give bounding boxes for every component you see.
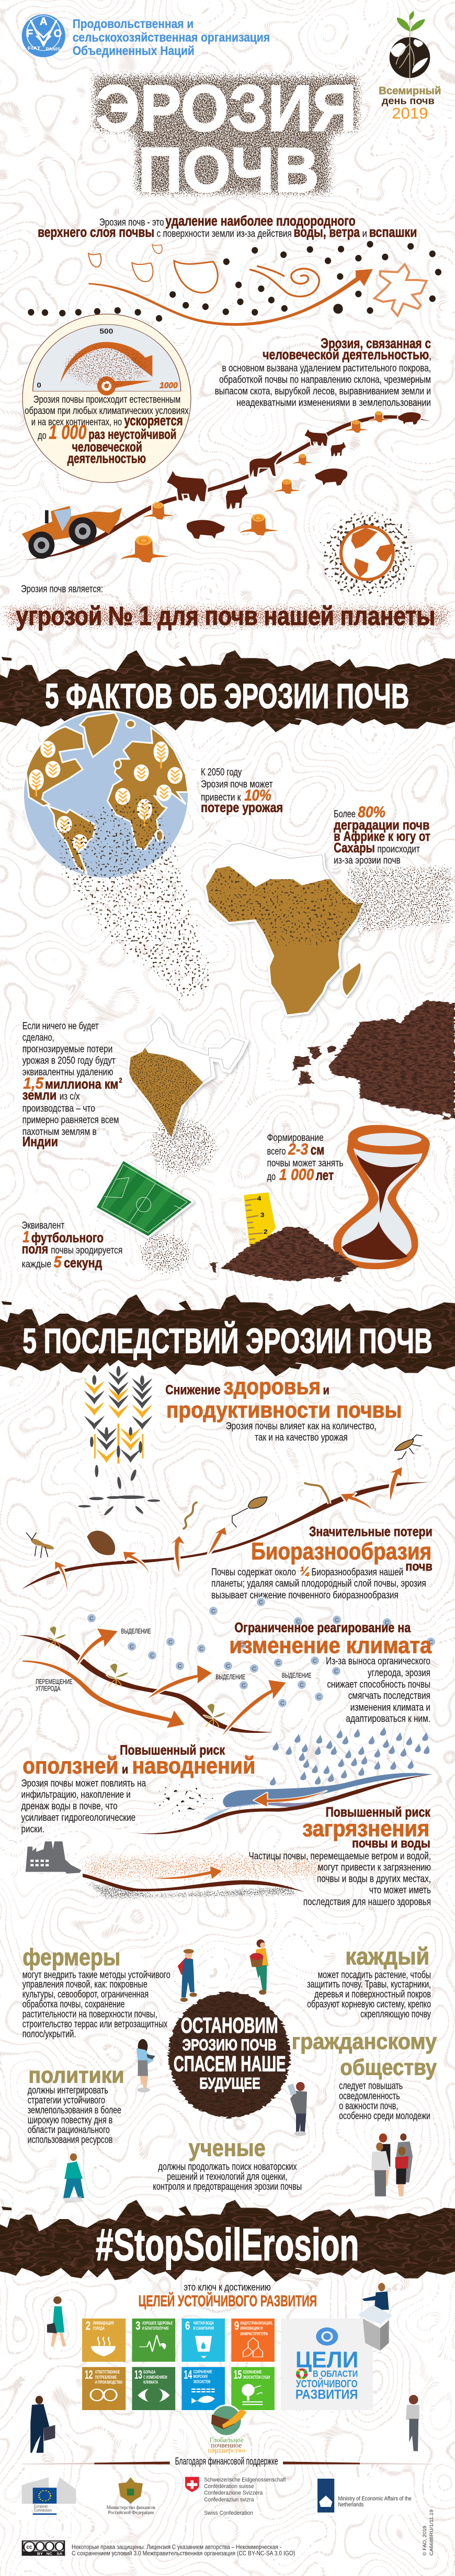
organisation name: сельскохозяйственная организация xyxy=(73,30,270,44)
landslides and floods text: усиливает гидрогеологические xyxy=(21,1812,135,1823)
soil formation text: лет xyxy=(316,1167,334,1183)
India erosion text: сделано, xyxy=(22,1032,54,1043)
soil formation text: см xyxy=(311,1142,324,1158)
panel: Sustainable Development Goals logo: РАЗВИТИЯ xyxy=(295,2387,358,2402)
soil health text: Снижение xyxy=(165,1383,221,1397)
carbon flow diagram: ВЫДЕЛЕНИЕ xyxy=(215,1673,245,1681)
water flow diagram xyxy=(126,1773,433,1834)
text: примерно равняется всем xyxy=(22,1114,119,1125)
tile 14 xyxy=(181,2367,225,2410)
definition text xyxy=(38,213,417,240)
farmers text: управления почвой, как: покровные xyxy=(22,1978,147,1990)
gauge dial xyxy=(33,324,181,396)
biodiversity curve with arrows and soil organisms xyxy=(22,1435,431,1593)
scientists text: решений и технологий для оценки, xyxy=(167,2171,287,2182)
politicians text: должны интегрировать xyxy=(28,2085,108,2096)
world map globe with wheat xyxy=(23,711,189,878)
person: woman with basket xyxy=(249,1940,268,1995)
football field text: футбольного xyxy=(31,1230,104,1245)
text: 2 xyxy=(119,1076,122,1084)
Africa map xyxy=(201,844,369,1014)
person: speaker at podium xyxy=(358,2283,392,2351)
logo: Swiss Confederation: Swiss Confederation xyxy=(204,2510,253,2516)
Africa text: Сахары xyxy=(334,840,375,855)
text: ВЫДЕЛЕНИЕ xyxy=(282,1672,311,1679)
SDG tiles xyxy=(82,2319,275,2410)
gauge panel: раз неустойчивой xyxy=(88,427,176,442)
pollution grey particles xyxy=(78,1879,301,1901)
text: растительности на поверхности почвы, xyxy=(22,2008,157,2020)
ground soil pile xyxy=(210,1226,358,1281)
SDG tiles: ХОРОШЕЕ ЗДОРОВЬЕ xyxy=(142,2321,173,2326)
tile 14: СОХРАНЕНИЕ xyxy=(194,2369,212,2375)
crop loss text: К 2050 году xyxy=(201,766,242,778)
Global Soil Partnership logo: почвенное xyxy=(211,2441,242,2449)
politicians text: использования ресурсов xyxy=(28,2134,112,2145)
India erosion text: пахотным землям в xyxy=(22,1126,97,1137)
logo: Swiss Confederation xyxy=(185,2477,286,2516)
people group xyxy=(371,2133,413,2197)
tile 9: ИННОВАЦИИ И xyxy=(240,2326,263,2331)
carbon flow diagram: ПЕРЕМЕЩЕНИЕ xyxy=(36,1678,73,1686)
CC licence badge: SA xyxy=(56,2552,63,2556)
India erosion text: производства – что xyxy=(22,1103,95,1114)
crop loss text: Эрозия почв может xyxy=(201,778,273,790)
CC licence badge: cc xyxy=(26,2544,32,2550)
FAO logo: A xyxy=(40,15,48,27)
World Soil Day logo xyxy=(390,11,430,82)
India erosion text: из с/х xyxy=(60,1091,80,1102)
person: woman in grey xyxy=(406,2395,419,2451)
logo: Russian Ministry of Finance xyxy=(107,2477,155,2515)
call to action: ЭРОЗИЮ ПОЧВ xyxy=(182,2036,277,2054)
panel: Sustainable Development Goals logo: УСТОЙЧИВОГО xyxy=(296,2378,358,2390)
tile 2: ГОЛОДА xyxy=(93,2326,105,2331)
landslides and floods text: Повышенный риск xyxy=(120,1742,225,1757)
tile 12: 12 xyxy=(85,2368,93,2381)
biodiversity text: Почвы содержат около xyxy=(211,1566,296,1577)
soil formation text: 2-3 xyxy=(288,1140,308,1158)
gauge panel xyxy=(22,314,191,483)
Africa erosion dots xyxy=(207,867,362,947)
tile 15: СОХРАНЕНИЕ xyxy=(243,2369,262,2375)
central soil circle xyxy=(168,1992,290,2118)
CC licence badge xyxy=(22,2540,65,2556)
soil health text: и xyxy=(323,1383,329,1397)
farmers text: фермеры xyxy=(22,1944,120,1970)
football field text xyxy=(22,1219,122,1271)
definition text: и xyxy=(362,228,367,239)
person: woman in teal dress xyxy=(47,2297,66,2346)
SDG tiles: И БЛАГОПОЛУЧИЕ xyxy=(142,2326,169,2331)
logo: European Commission: European xyxy=(34,2504,48,2509)
financial support divider: Благодаря финансовой поддержке xyxy=(175,2456,278,2467)
icon: tractor xyxy=(22,506,122,559)
section banner: 5 facts xyxy=(0,650,455,732)
biodiversity text: почв xyxy=(405,1559,433,1573)
tile 2 xyxy=(82,2319,126,2362)
India erosion text xyxy=(22,1020,122,1149)
text: ИНФРАСТРУКТУРА xyxy=(240,2331,268,2336)
organisation name: Объединенных Наций xyxy=(73,43,195,58)
World Soil Day label: 2019 xyxy=(392,105,428,122)
football field text: поля xyxy=(22,1241,48,1257)
tile 13: КЛИМАТА xyxy=(143,2379,158,2385)
tile 6: И САНИТАРИЯ xyxy=(194,2326,214,2331)
soil pile xyxy=(293,1001,455,1120)
carbon flow diagram xyxy=(19,1626,311,1736)
section banner: 5 consequences xyxy=(0,1294,455,1376)
hourglass xyxy=(333,1125,430,1269)
Global Soil Partnership logo xyxy=(208,2405,247,2455)
person: farmer xyxy=(178,1949,197,2002)
gauge dial: 0 xyxy=(37,382,41,389)
ruler in soil xyxy=(244,1192,276,1248)
carbon flow diagram: ВЫДЕЛЕНИЕ xyxy=(121,1627,151,1635)
tile 13: 13 xyxy=(134,2368,142,2381)
gauge text: деятельностью xyxy=(67,451,146,466)
text: должны продолжать поиск новаторских xyxy=(158,2161,297,2172)
landslides and floods text: и xyxy=(122,1762,128,1776)
soil stipple behind threat statement xyxy=(0,601,455,632)
soil formation text xyxy=(267,1132,343,1183)
World Soil Day label xyxy=(379,85,441,122)
tile 6 xyxy=(181,2319,225,2362)
FAO logo xyxy=(22,14,65,57)
scientists text xyxy=(153,2135,302,2192)
crop loss text xyxy=(201,766,283,815)
football field text: 5 xyxy=(54,1253,62,1271)
logo: Netherlands ministry xyxy=(316,2477,414,2515)
landslides and floods text: риски. xyxy=(21,1823,44,1834)
tile 15: 15 xyxy=(234,2368,242,2381)
person: woman with tablet xyxy=(136,2039,155,2092)
India erosion text: Индии xyxy=(22,1134,58,1149)
logo: Netherlands ministry: Netherlands xyxy=(338,2502,363,2508)
human activity text: , xyxy=(429,350,431,362)
farmers text: обработка почвы, сохранение xyxy=(22,1998,125,2010)
scientists text: ученые xyxy=(189,2135,266,2161)
tile 13 xyxy=(132,2367,175,2410)
logo: Swiss Confederation: Schweizerische Eidgenossenschaft xyxy=(204,2477,286,2483)
ruler in soil: 3 xyxy=(260,1212,265,1219)
football field xyxy=(97,1161,191,1236)
document code: CA6688RU/1/11.19 xyxy=(429,2510,435,2556)
tile 2: 2 xyxy=(86,2319,90,2333)
soil stipple below field xyxy=(136,1230,194,1277)
India erosion dots xyxy=(130,1049,202,1137)
SDG tiles: И ПРОИЗВОДСТВО xyxy=(95,2379,122,2385)
FAO logo: PANIS xyxy=(46,47,60,52)
land use slope with tractor, stumps and animals xyxy=(22,411,431,563)
tile 9 xyxy=(231,2319,275,2362)
gauge text: до xyxy=(38,430,47,441)
text: почвы может занять xyxy=(267,1157,343,1169)
India erosion text: урожая в 2050 году будут xyxy=(22,1055,116,1066)
gauge dial: 500 xyxy=(99,328,113,335)
licence text xyxy=(72,2544,295,2557)
football field text: Эквивалент xyxy=(22,1219,64,1231)
tile 14: ЭКОСИСТЕМ xyxy=(194,2379,210,2384)
India erosion text: прогнозируемые потери xyxy=(22,1043,112,1055)
text: могут внедрить такие методы устойчивого xyxy=(22,1969,170,1980)
gauge text: и на всех континентах, но xyxy=(31,416,122,428)
panel: Sustainable Development Goals logo xyxy=(281,2319,373,2410)
landslides and floods text: дренаж воды в почве, что xyxy=(21,1800,118,1811)
football field text: каждые xyxy=(22,1258,51,1270)
politicians text: широкую повестку дня в xyxy=(28,2114,112,2125)
text: ИНДУСТРИАЛИЗАЦИЯ, xyxy=(240,2321,273,2326)
soil health text xyxy=(165,1374,402,1443)
scattered soil right of Africa xyxy=(343,864,455,937)
tile 12 xyxy=(82,2367,126,2410)
soil health text: так и на качество урожая xyxy=(255,1431,348,1443)
organisation name xyxy=(73,16,270,58)
tile 3 xyxy=(132,2319,175,2362)
carbon particles: CCCCCCCCCCCCCCCCCCCCCC xyxy=(89,1599,433,1707)
person: teal man xyxy=(62,2153,84,2203)
FAO logo: FIAT xyxy=(28,46,41,51)
India erosion text: Если ничего не будет xyxy=(22,1020,99,1032)
erosion dots on globe xyxy=(47,785,220,1010)
definition text: с поверхности земли из-за действия xyxy=(157,228,292,239)
landslides and floods text: Эрозия почвы может повлиять на xyxy=(21,1777,146,1789)
pollution text xyxy=(249,1805,431,1907)
tile 15 xyxy=(231,2367,275,2410)
crop loss text: привести к xyxy=(201,791,241,803)
text: почвы эродируется xyxy=(51,1245,122,1256)
CC licence badge: NC xyxy=(47,2552,52,2556)
text: ЭКОСИСТЕМ СУШИ xyxy=(243,2375,270,2380)
soil formation text: 1 000 xyxy=(279,1166,314,1183)
farmers text: культуры, севооборот, ограниченная xyxy=(22,1988,149,2000)
FAO logo: O xyxy=(54,27,62,39)
soil stipple around globe xyxy=(316,508,418,602)
soil stipple behind main title xyxy=(89,71,363,199)
landslides and floods text: оползней xyxy=(22,1753,118,1778)
tile 9: 9 xyxy=(234,2319,239,2333)
tile 3: 3 xyxy=(135,2319,141,2333)
soil formation text: Формирование xyxy=(267,1132,324,1143)
gauge text: человеческой xyxy=(72,439,142,454)
Africa text: Более xyxy=(334,808,356,820)
icon: wheat xyxy=(78,1360,161,1464)
logo: Russian Ministry of Finance: Министерство финансов xyxy=(107,2505,155,2510)
tile 6: 6 xyxy=(185,2319,190,2333)
tile 13: С ИЗМЕНЕНИЕМ xyxy=(143,2375,167,2380)
climate change text xyxy=(229,1620,432,1724)
pollution orange particles xyxy=(78,1850,329,1884)
landslides and floods text xyxy=(21,1742,255,1834)
farmers text xyxy=(22,1944,170,2040)
logo: European Commission xyxy=(22,2477,76,2515)
tile 14: МОРСКИХ xyxy=(194,2373,208,2379)
soil health text: здоровья xyxy=(223,1374,321,1399)
definition text: верхнего слоя почвы xyxy=(38,224,154,240)
gauge panel: Эрозия почвы происходит естественным xyxy=(33,394,180,405)
CC licence badge: BY xyxy=(37,2552,43,2556)
main title: ПОЧВ xyxy=(138,135,319,206)
factory and polluted soil layer xyxy=(26,1841,305,1892)
call to action xyxy=(174,2013,286,2092)
India erosion text: земли xyxy=(22,1088,56,1103)
politicians text: области рационального xyxy=(28,2124,110,2135)
gauge text xyxy=(25,394,189,466)
gauge text: 1 000 xyxy=(49,421,86,443)
SDG heading xyxy=(139,2281,317,2310)
biodiversity text: ¼ xyxy=(300,1564,310,1578)
scattered black soil particles xyxy=(146,1780,220,1820)
panel: Sustainable Development Goals logo: В ОБЛАСТИ xyxy=(313,2369,358,2379)
politicians text: политики xyxy=(28,2063,124,2088)
text: землепользования в более xyxy=(28,2104,121,2115)
soil formation text: всего xyxy=(267,1146,286,1157)
icon: orange globe xyxy=(341,527,393,579)
India erosion text: 1,5 xyxy=(23,1074,44,1092)
civil society text xyxy=(292,2029,437,2121)
text: Эрозия почв является: xyxy=(21,583,103,595)
financial support divider xyxy=(22,2456,433,2467)
gauge text: ускоряется xyxy=(124,413,183,428)
tile 13: БОРЬБА xyxy=(143,2369,156,2375)
definition text: Эрозия почв - это xyxy=(99,217,164,228)
football field text: секунд xyxy=(64,1255,102,1270)
tile 14: 14 xyxy=(184,2368,192,2381)
crop loss text: 10% xyxy=(244,787,271,804)
person: man with tablet xyxy=(287,2082,307,2136)
text: строительство террас или ветрозащитных xyxy=(22,2018,167,2030)
logo: Swiss Confederation: Confédération suisse xyxy=(204,2483,254,2490)
football field text: 1 xyxy=(22,1228,30,1246)
FAO logo: F xyxy=(26,27,33,39)
text: потере урожая xyxy=(201,800,283,815)
organisation name: Продовольственная и xyxy=(73,16,194,30)
politicians text xyxy=(28,2063,124,2145)
section banner: StopSoilErosion xyxy=(0,2200,455,2282)
soil stipple below India xyxy=(146,1115,220,1178)
panel: Sustainable Development Goals logo: ЦЕЛИ xyxy=(295,2347,358,2372)
call to action: БУДУЩЕЕ xyxy=(199,2074,260,2092)
logo: Swiss Confederation: Confederaziun svizra xyxy=(204,2497,254,2503)
ruler in soil: 4 xyxy=(257,1195,261,1202)
tile 2: ЛИКВИДАЦИЯ xyxy=(93,2321,114,2326)
tile 12: ПОТРЕБЛЕНИЕ xyxy=(95,2375,117,2380)
everyone text xyxy=(307,1943,431,2020)
carbon flow diagram: УГЛЕРОДА xyxy=(36,1685,61,1693)
SDG heading: это ключ к достижению xyxy=(184,2281,271,2293)
main title xyxy=(96,72,357,206)
landslides and floods text: наводнений xyxy=(132,1753,255,1778)
India map xyxy=(120,1015,247,1146)
gauge dial: 1000 xyxy=(160,380,178,390)
SDG tiles: ОТВЕТСТВЕННОЕ xyxy=(95,2369,120,2375)
erosion illustration: wind, leaves and soil particles xyxy=(25,238,445,326)
tile 6: ЧИСТАЯ ВОДА xyxy=(194,2321,214,2326)
Global Soil Partnership logo: Глобальное xyxy=(210,2436,244,2444)
politicians text: стратегии устойчивого xyxy=(28,2095,105,2105)
text: СПАСЕМ НАШЕ xyxy=(174,2052,286,2076)
India erosion text: миллиона км xyxy=(45,1077,118,1092)
person: businessman xyxy=(30,2396,55,2453)
landslides and floods text: инфильтрацию, накопление и xyxy=(21,1789,131,1800)
Africa text: 80% xyxy=(358,803,385,821)
logo: Swiss Confederation: Confederazione Svizzera xyxy=(204,2490,263,2496)
document code xyxy=(422,2510,435,2556)
logo: Russian Ministry of Finance: Российской Федерации xyxy=(108,2510,154,2515)
text: ОСТАНОВИМ xyxy=(181,2013,278,2037)
soil formation text: до xyxy=(267,1171,276,1182)
document code: © FAO, 2019 xyxy=(422,2526,428,2556)
gauge stipple xyxy=(59,341,155,391)
biodiversity text xyxy=(211,1524,433,1600)
farmers text: полос/укрытий. xyxy=(22,2028,76,2040)
rain drops xyxy=(270,1727,429,1785)
falling grains xyxy=(78,1465,160,1516)
Africa text xyxy=(334,803,430,866)
definition text: воды, ветра xyxy=(294,224,360,240)
human activity text xyxy=(215,335,431,408)
logo: European Commission: Commission xyxy=(34,2508,52,2513)
text: образом при любых климатических условиях xyxy=(25,405,189,416)
Global Soil Partnership logo: партнерство xyxy=(208,2446,245,2455)
India erosion text: эквивалентны удалению xyxy=(22,1066,113,1078)
ruler in soil: 2 xyxy=(264,1228,268,1236)
